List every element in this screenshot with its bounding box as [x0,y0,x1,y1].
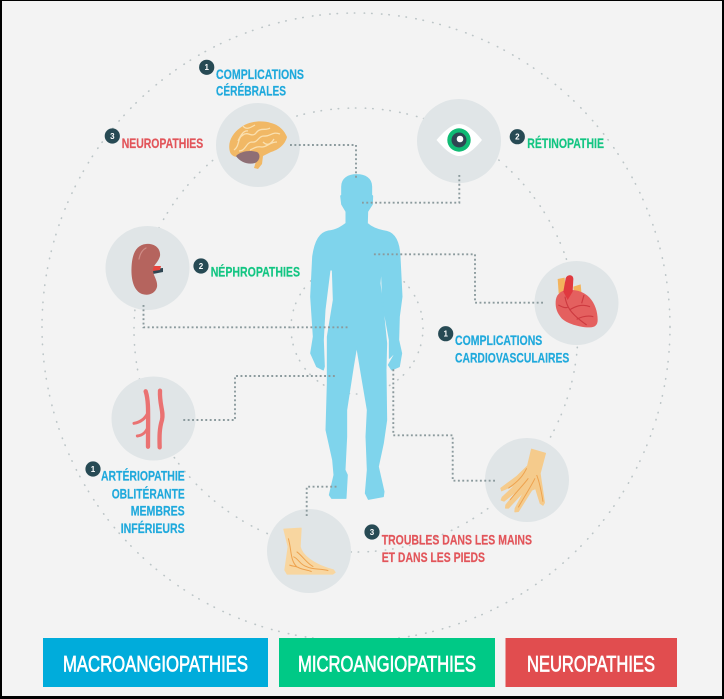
label: rétinopathie: RÉTINOPATHIE [527,135,604,151]
label: troubles dans les mains et dans les pieds: ET DANS LES PIEDS [382,550,485,565]
legend: macroangiopathies: MACROANGIOPATHIES [63,652,248,676]
label: complications cardiovasculaires: CARDIOVASCULAIRES [455,351,569,366]
label: neuropathies: NEUROPATHIES [122,136,203,151]
label: rétinopathie [510,129,604,151]
connector: arteries to leg [183,376,335,420]
legend: neuropathies [506,638,677,687]
label: artériopathie oblitérante membres inférieurs [85,461,185,536]
label: néphropathies: 2 [199,262,204,271]
legend: microangiopathies [279,638,495,687]
label: complications cérébrales: CÉRÉBRALES [216,82,286,98]
connector: brain to head [290,145,356,178]
label: artériopathie oblitérante membres inférieurs: MEMBRES [131,504,185,519]
label: complications cérébrales [199,60,304,98]
icon: hand [485,438,569,522]
label: troubles dans les mains et dans les pieds: TROUBLES DANS LES MAINS [382,532,532,547]
label: artériopathie oblitérante membres inférieurs: ARTÉRIOPATHIE [101,468,185,484]
legend: neuropathies: NEUROPATHIES [527,652,655,676]
icon: foot [267,509,351,593]
label: complications cérébrales: COMPLICATIONS [216,67,304,82]
label: troubles dans les mains et dans les pieds: 3 [370,528,375,537]
label: artériopathie oblitérante membres inférieurs: 1 [91,465,96,474]
label: complications cérébrales: 1 [204,63,209,72]
legend: macroangiopathies [43,638,268,687]
icon: heart [534,261,618,345]
label: complications cardiovasculaires: 1 [443,330,448,339]
label: néphropathies: NÉPHROPATHIES [211,264,300,280]
label: neuropathies [105,128,203,151]
human body silhouette [311,175,402,499]
legend: microangiopathies: MICROANGIOPATHIES [298,652,476,676]
label: complications cardiovasculaires: COMPLICATIONS [455,333,542,348]
label: complications cardiovasculaires [438,326,569,366]
icon: brain [216,103,300,187]
label: artériopathie oblitérante membres inférieurs: OBLITÉRANTE [112,485,185,501]
connector: hand to hand [393,368,495,481]
connector: heart to chest [372,254,543,303]
label: néphropathies [193,258,300,280]
connector: eye to head [362,175,459,203]
icon: arteries [112,376,196,460]
label: troubles dans les mains et dans les pieds [364,524,532,565]
icon: kidney [106,226,190,310]
icon: eye [417,99,501,183]
label: rétinopathie: 2 [515,133,520,142]
connector: foot to ankle [307,487,338,516]
label: neuropathies: 3 [110,132,115,141]
label: artériopathie oblitérante membres inférieurs: INFÉRIEURS [121,520,185,536]
connector: kidney to abdomen [144,305,350,327]
